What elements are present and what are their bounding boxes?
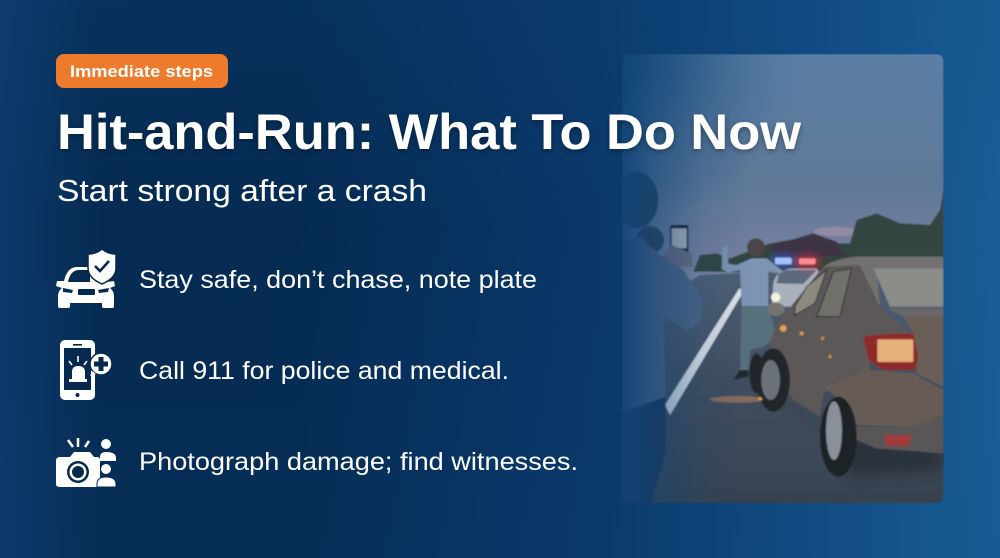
badge: Immediate steps — [56, 54, 228, 88]
street glow — [710, 396, 763, 403]
text: Call 911 for police and medical. — [139, 357, 509, 385]
photo top-left fade — [622, 54, 772, 172]
icon: phone with siren and medical cross — [60, 340, 112, 400]
step 3: photograph damage — [56, 438, 578, 487]
wheels — [749, 353, 764, 393]
icon: car with shield — [56, 249, 116, 308]
side mirror — [767, 303, 785, 316]
shadow under car — [846, 440, 944, 478]
photo: crash scene with police car — [615, 54, 944, 503]
subtitle: Start strong after a crash — [57, 173, 427, 208]
damaged car — [749, 257, 943, 477]
road — [620, 273, 943, 503]
standing man — [722, 238, 783, 380]
tail light — [863, 333, 918, 370]
badge: Immediate steps: Immediate steps — [70, 63, 213, 81]
door reflections — [780, 325, 787, 332]
road edge line — [665, 288, 744, 415]
text: Stay safe, don’t chase, note plate — [139, 266, 537, 294]
tree line — [693, 190, 943, 273]
photo left fade — [622, 54, 738, 503]
title: Hit-and-Run: What To Do Now — [57, 104, 801, 160]
sky — [620, 54, 943, 287]
icon: camera and witnesses — [56, 438, 116, 487]
text: Photograph damage; find witnesses. — [139, 448, 578, 476]
photographer — [627, 172, 703, 502]
step 2: call 911 — [60, 340, 509, 400]
police car — [769, 254, 821, 307]
step 1: stay safe — [56, 249, 537, 308]
